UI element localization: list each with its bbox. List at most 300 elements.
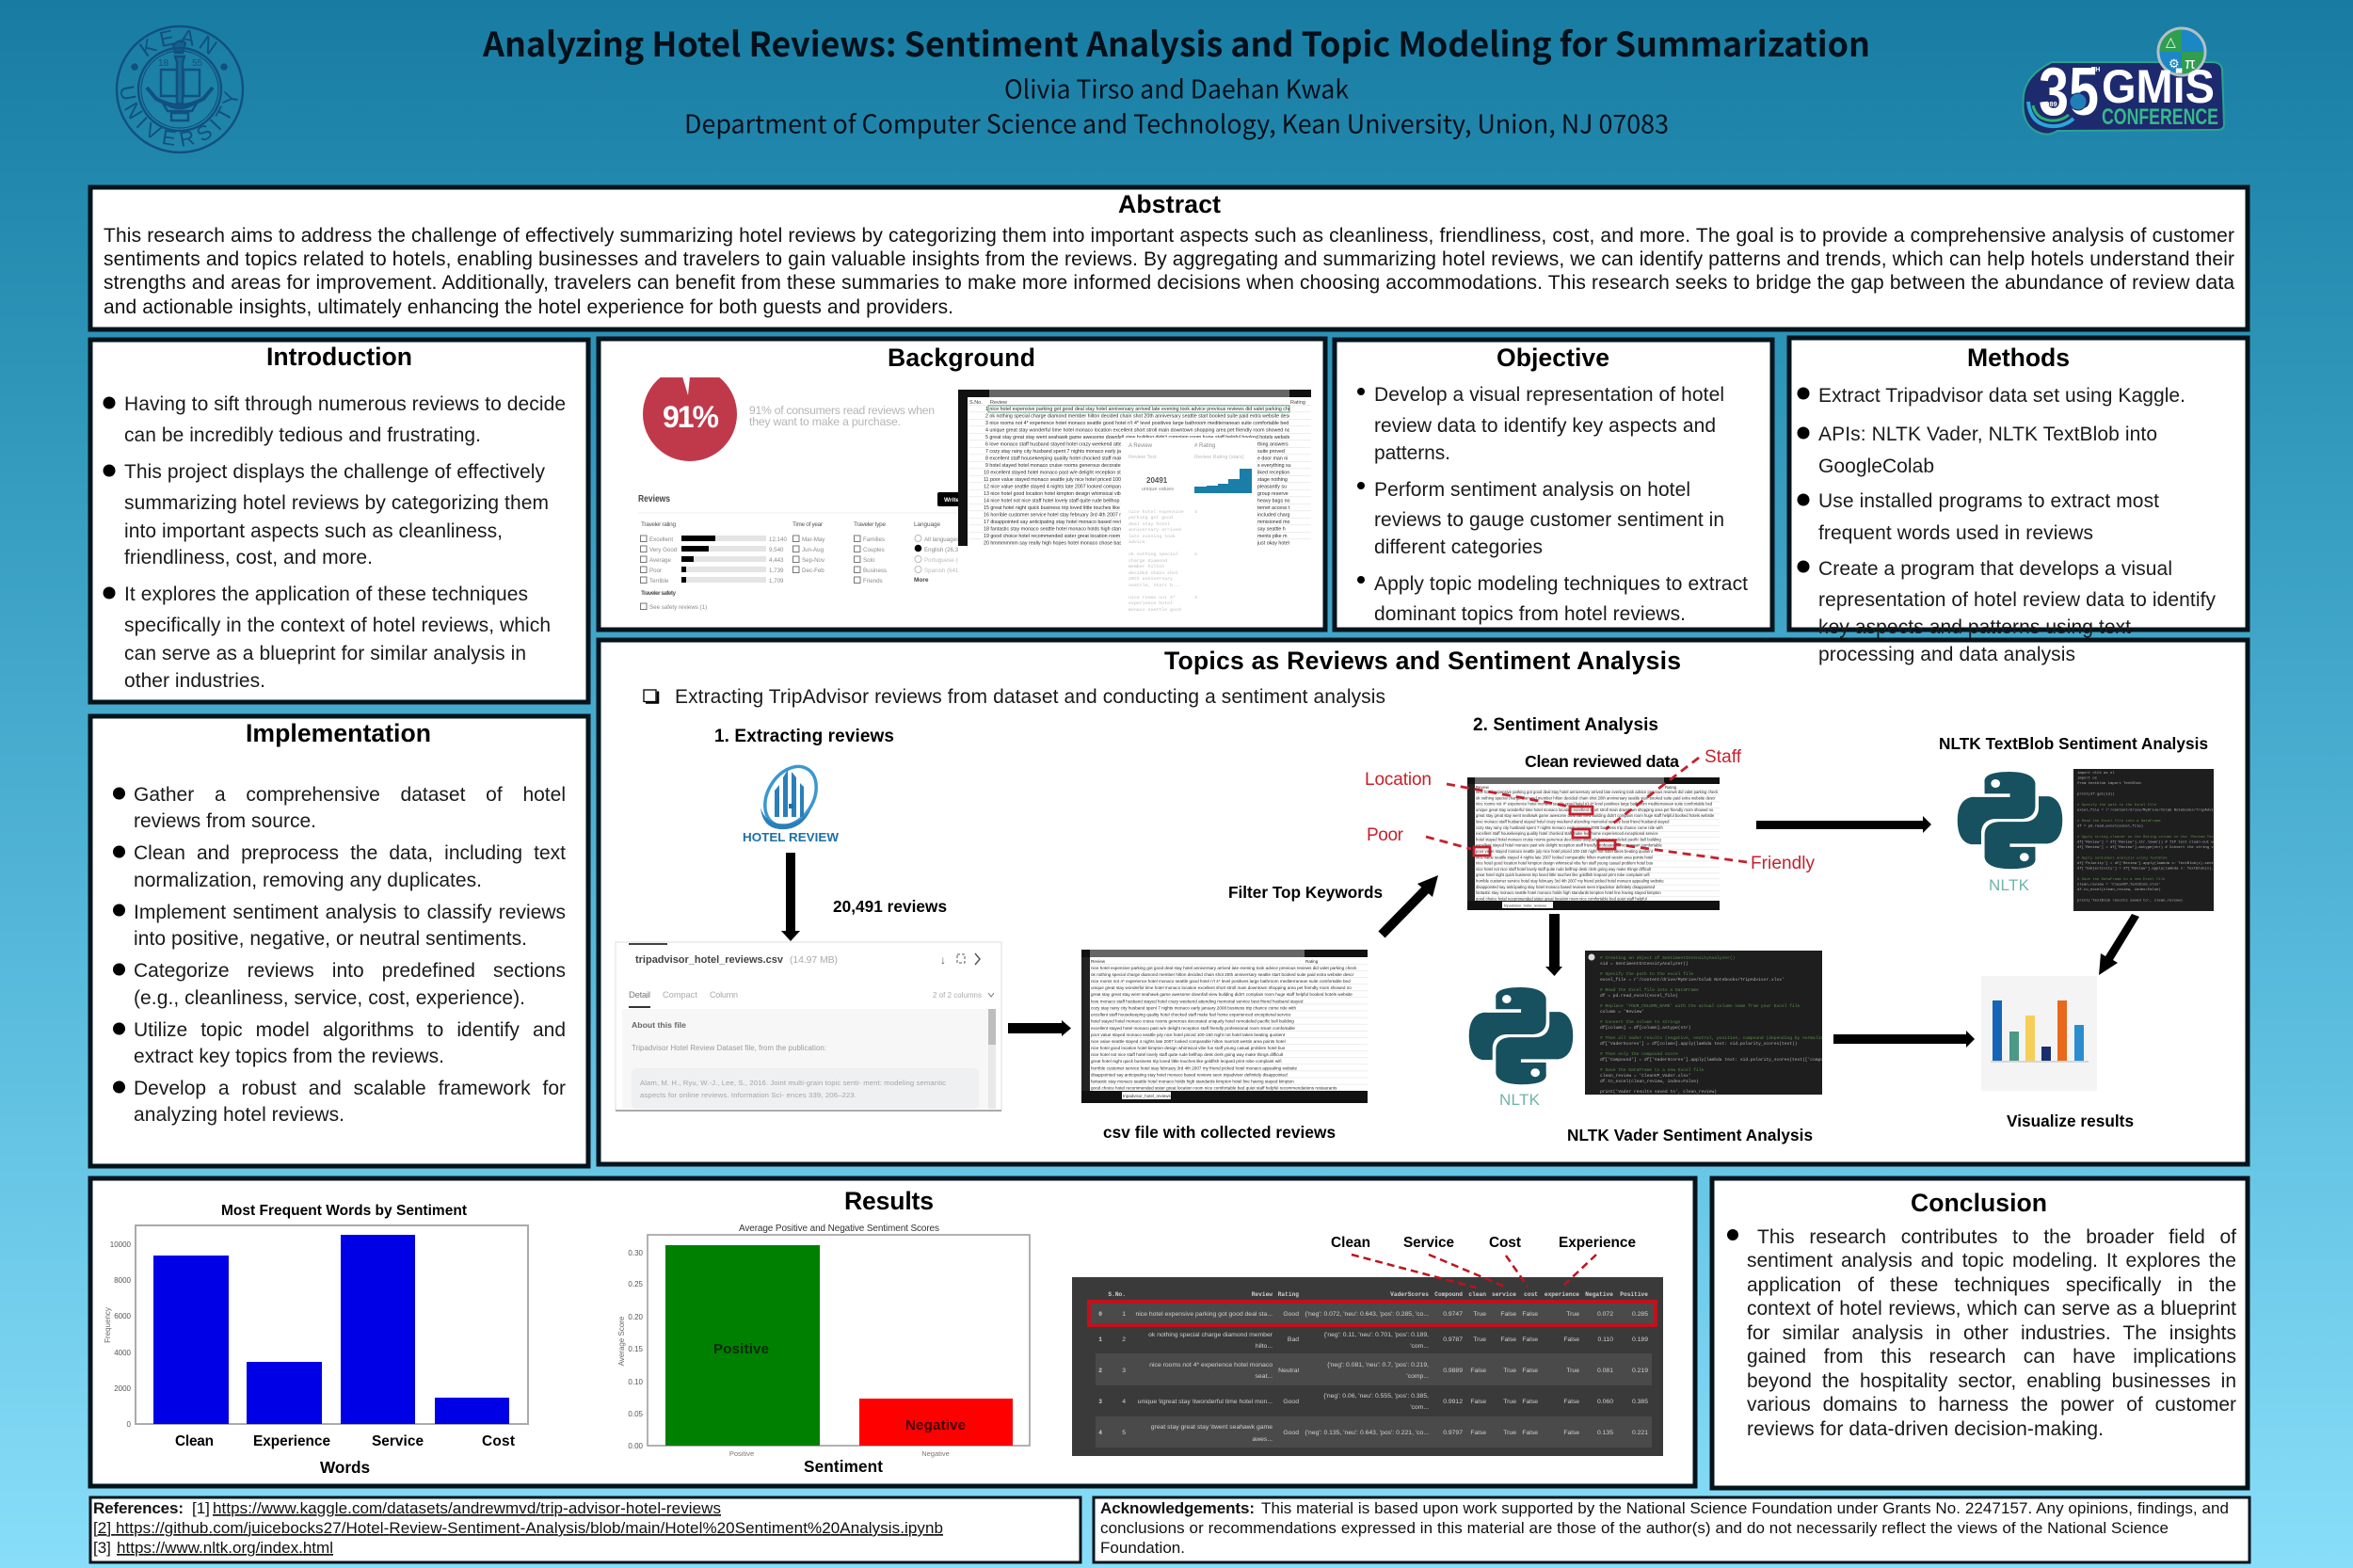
kaggle file card screenshot: About this file — [632, 1020, 686, 1030]
code screenshot: textblob: print(df.get(id)) — [2077, 792, 2115, 796]
arrow: logo to file — [781, 853, 800, 941]
introduction text: into important aspects such as cleanliness, — [124, 520, 503, 542]
table: sentiment scores screenshot: experience — [1545, 1291, 1579, 1298]
icon: 35th GMiS conference logo: TH — [2091, 67, 2100, 73]
spreadsheet screenshot with review column summary: 20th anniversary — [1128, 576, 1173, 582]
chart: most frequent words by sentiment — [104, 1203, 528, 1477]
authors: Olivia Tirso and Daehan Kwak — [1004, 70, 1349, 105]
kaggle file card screenshot: ↓ — [940, 953, 946, 967]
arrow: clean data to textblob — [1756, 816, 1931, 833]
spreadsheet screenshot with review column summary: experience hotel — [1128, 600, 1173, 606]
implementation text: extract key topics from the reviews. — [134, 1046, 444, 1067]
spreadsheet screenshot with review column summary: parking got good — [1128, 515, 1173, 520]
code screenshot: textblob: from textblob import TextBlob — [2077, 781, 2141, 786]
icon: python NLTK textblob — [1958, 772, 2062, 894]
objective text: Perform sentiment analysis on hotel — [1374, 479, 1690, 501]
introduction text: This project displays the challenge of effectively — [124, 461, 546, 483]
objective text: patterns. — [1374, 442, 1450, 464]
chart: most frequent words by sentiment: Frequency — [104, 1307, 112, 1343]
clean data spreadsheet with keyword callouts: horrible customer service hotel stay february 3rd 4th 2007 my friend picked hotel monaco appealing website — [1476, 879, 1664, 883]
csv spreadsheet screenshot: great stay great stay went seahawk game awesome downfall view building didn't complain room huge staff helpful booked hotels website — [1091, 992, 1353, 997]
code screenshot: vader: df[column] = df[column].astype(str) — [1600, 1025, 1690, 1031]
reviews filter screenshot: Language — [914, 521, 940, 528]
table: sentiment scores screenshot: {'neg': 0.06, 'neu': 0.555, 'pos': 0.385, — [1323, 1393, 1429, 1400]
table: sentiment scores screenshot: unique \tgreat stay \twonderful time hotel mon... — [1138, 1399, 1273, 1405]
table: sentiment scores screenshot: False — [1522, 1311, 1538, 1318]
conclusion text: beyond the hospitality sector, enabling businesses in — [1747, 1370, 2236, 1392]
table: sentiment scores screenshot: True — [1566, 1368, 1579, 1374]
table: sentiment scores screenshot: VaderScores — [1390, 1291, 1429, 1298]
kaggle file card screenshot: Detail — [629, 990, 650, 1000]
implementation text: Develop a robust and scalable framework for — [134, 1078, 566, 1099]
callouts: table column labels: Service — [1403, 1235, 1454, 1251]
implementation bullets — [113, 787, 125, 1094]
spreadsheet screenshot with review column summary: 20 hmmmmmm say really high hopes hotel monaco chose base girl — [984, 540, 1132, 546]
heading: abstract: Abstract — [1118, 190, 1221, 218]
csv spreadsheet screenshot: tripadvisor_hotel_reviews — [1123, 1094, 1172, 1098]
code screenshot: textblob: df['Polarity'] = df['Review'].apply(lambda x: TextBlob(x).sentiment.polarity) — [2077, 861, 2247, 866]
clean data spreadsheet with keyword callouts — [1365, 747, 1815, 910]
spreadsheet screenshot with review column summary: ok nothing special — [1128, 552, 1178, 557]
conclusion text: context of hotel reviews, which can serve as a blueprint — [1747, 1298, 2236, 1320]
spreadsheet screenshot with review column summary: 18 fantastic stay monaco seattle hotel monaco holds high standards kimpton hotel line having stayed — [984, 527, 1206, 533]
chart: 91 percent pie: 91% — [663, 400, 719, 434]
table: sentiment scores screenshot: 0.221 — [1632, 1430, 1648, 1436]
chart: average positive and negative sentiment scores: 0.10 — [628, 1378, 644, 1386]
spreadsheet screenshot with review column summary: 13 nice hotel good location hotel kimpton design whimsical vibe fun staff young casual problem hotel — [984, 491, 1205, 497]
chart: most frequent words by sentiment: Words — [320, 1458, 370, 1477]
code screenshot: textblob: excel_file = r'/content/drive/MyDrive/Colab Notebooks/TripAdvisor.xlsx' — [2077, 808, 2233, 813]
reviews filter screenshot — [638, 492, 969, 611]
heading: methods: Methods — [1967, 344, 2070, 372]
table: sentiment scores screenshot: 2 — [1098, 1368, 1102, 1374]
csv spreadsheet screenshot: fantastic stay monaco seattle hotel monaco holds high standards kimpton hotel line having stayed kimpton — [1091, 1079, 1294, 1084]
introduction text: Having to sift through numerous reviews to decide — [124, 393, 566, 415]
methods text: Extract Tripadvisor data set using Kaggle. — [1818, 385, 2185, 407]
panel: abstract — [90, 187, 2248, 329]
caption: visualize results: Visualize results — [2007, 1112, 2134, 1130]
panel: acknowledgements: This material is based upon work supported by the National Science Foundation under Grants No. 2247157. Any opinions, findings, and — [1261, 1499, 2229, 1517]
spreadsheet screenshot with review column summary: Review Rating (stars) — [1194, 455, 1244, 460]
table: sentiment scores screenshot: 4 — [1098, 1430, 1102, 1436]
arrow: vader to visualize — [1833, 1031, 1975, 1048]
table: sentiment scores screenshot: 0.9787 — [1443, 1336, 1463, 1343]
heading: conclusion: Conclusion — [1911, 1189, 2047, 1217]
spreadsheet screenshot with review column summary: s everything su — [1257, 463, 1291, 469]
table: sentiment scores screenshot: Rating — [1278, 1291, 1299, 1298]
chart: most frequent words by sentiment: Cost — [482, 1433, 515, 1449]
objective text — [1374, 384, 1748, 625]
icon: Kean University seal: 55 — [192, 58, 203, 69]
reviews filter screenshot: Excellent — [649, 536, 673, 543]
icon: 35th GMiS conference logo: GMiS — [2102, 60, 2215, 113]
table: sentiment scores screenshot: 0.9912 — [1443, 1399, 1463, 1405]
table: sentiment scores screenshot: False — [1563, 1430, 1579, 1436]
spreadsheet screenshot with review column summary: seattle, start b... — [1128, 583, 1181, 588]
reviews filter screenshot: 12,140 — [769, 536, 787, 543]
icon: 35th GMiS conference logo — [2023, 28, 2224, 135]
clean data spreadsheet with keyword callouts: disappointed say anticipating stay hotel monaco based reviews seen tripadvisor definitely disappointed — [1476, 885, 1656, 889]
table: sentiment scores screenshot: False — [1522, 1399, 1538, 1405]
table: sentiment scores screenshot: True — [1473, 1336, 1486, 1343]
introduction text: can serve as a blueprint for similar analysis in — [124, 643, 526, 664]
icon: 35th GMiS conference logo: 35 — [2039, 55, 2099, 130]
panel: references: https://www.nltk.org/index.html — [117, 1539, 333, 1557]
table: sentiment scores screenshot: False — [1522, 1336, 1538, 1343]
reviews filter screenshot: Families — [863, 536, 885, 543]
code screenshot: textblob: import nltk as nl — [2077, 771, 2115, 776]
clean data spreadsheet with keyword callouts: cozy stay rainy city husband spent 7 nights monaco early january 2008 business trip chance come ride with — [1476, 825, 1663, 830]
kaggle file card screenshot: (14.97 MB) — [790, 954, 838, 966]
reviews filter screenshot: More — [914, 577, 929, 584]
csv spreadsheet screenshot: poor value stayed monaco seattle july nice hotel priced 100-150 night not hotel takes beating quotient — [1091, 1032, 1286, 1037]
spreadsheet screenshot with review column summary: 20491 — [1146, 476, 1168, 485]
clean data spreadsheet with keyword callouts: unique great stay wonderful time hotel monaco location excellent short stroll main downtown shopping area pet friendly room showed no — [1476, 808, 1714, 812]
code screenshot: textblob: df.to_excel(clean_review, index=False) — [2077, 888, 2161, 892]
chart: average positive and negative sentiment scores: Average Positive and Negative Sentiment Scores — [739, 1224, 939, 1234]
label: 20,491 reviews: 20,491 reviews — [833, 897, 947, 916]
clean data spreadsheet with keyword callouts: great stay great stay went seahawk game awesome downfall view building didn't complain room huge staff helpful booked hotels website — [1476, 813, 1715, 818]
reviews filter screenshot: 9,540 — [769, 547, 784, 553]
objective text: Apply topic modeling techniques to extract — [1374, 573, 1748, 595]
heading: implementation: Implementation — [246, 719, 431, 747]
table: sentiment scores screenshot: clean — [1468, 1291, 1486, 1298]
spreadsheet screenshot with review column summary: decided chain shot — [1128, 570, 1178, 576]
code screenshot: vader: df['Compound'] = df['VaderScores'].apply(lambda text: sid.polarity_scores(text)['compound']) — [1600, 1057, 1839, 1063]
objective text: Develop a visual representation of hotel — [1374, 384, 1724, 406]
reviews filter screenshot: All languages — [924, 536, 959, 543]
reviews filter screenshot: Traveler type — [854, 521, 886, 528]
icon: 35th GMiS conference logo: CONFERENCE — [2102, 104, 2218, 130]
reviews filter screenshot: Sep-Nov — [802, 557, 825, 564]
csv spreadsheet screenshot: horrible customer service hotel stay february 3rd 4th 2007 my friend picked hotel monaco appealing website — [1091, 1065, 1298, 1071]
code screenshot: textblob: # Specify the path to the Excel file — [2077, 803, 2157, 808]
icon: python NLTK textblob: NLTK — [1989, 876, 2030, 894]
kaggle file card screenshot: aspects for online reviews. Information Sci- ences 339, 206–223. — [640, 1091, 856, 1099]
kaggle file card screenshot: 2 of 2 columns — [933, 991, 982, 1000]
table: sentiment scores screenshot: 0.9747 — [1443, 1311, 1463, 1318]
table: sentiment scores screenshot: True — [1503, 1399, 1516, 1405]
chart: average positive and negative sentiment scores: Negative — [905, 1417, 966, 1433]
csv spreadsheet screenshot: nice rooms not 4* experience hotel monaco seattle good hotel n't 4* level positives large bathroom mediterranean suite comfortable bed — [1091, 979, 1351, 984]
kaggle file card screenshot: Compact — [663, 990, 697, 1000]
csv spreadsheet screenshot: excellent staff housekeeping quality hotel chocked staff make feel home experienced exceptional service — [1091, 1013, 1291, 1016]
panel: acknowledgements — [1094, 1497, 2249, 1562]
chart: most frequent words by sentiment: 0 — [127, 1420, 132, 1429]
table: sentiment scores screenshot: Compound — [1434, 1291, 1463, 1298]
methods text: Use installed programs to extract most — [1818, 490, 2159, 512]
panel: results — [90, 1178, 1695, 1486]
chart: most frequent words by sentiment: Experience — [253, 1433, 330, 1449]
table: sentiment scores screenshot: 'com... — [1410, 1404, 1429, 1411]
csv spreadsheet screenshot — [1081, 950, 1368, 1103]
csv spreadsheet screenshot: excellent stayed hotel monaco past w/e delight reception staff friendly professional room smart comfortable — [1091, 1026, 1295, 1031]
methods text: processing and data analysis — [1818, 644, 2075, 665]
spreadsheet screenshot with review column summary: suite proved — [1257, 449, 1285, 455]
panel: references: https://www.kaggle.com/datasets/andrewmvd/trip-advisor-hotel-reviews — [213, 1499, 721, 1517]
abstract text: strengths and areas for improvement. Additionally, travelers can benefit from these summaries to make more informed decisions when choosing accommodations. This research seeks to bridge the gap between the abundance of review data — [104, 272, 2234, 294]
spreadsheet screenshot with review column summary: 4 — [1194, 509, 1197, 515]
chart: average positive and negative sentiment scores: 0.00 — [628, 1442, 644, 1450]
reviews filter screenshot: Friends — [863, 578, 883, 584]
spreadsheet screenshot with review column summary: charge diamond — [1128, 558, 1167, 564]
table: sentiment scores screenshot: seat... — [1255, 1373, 1273, 1380]
reviews filter screenshot: Average — [649, 557, 671, 564]
table: sentiment scores screenshot: False — [1563, 1336, 1579, 1343]
icon: 35th GMiS conference logo: π — [2185, 55, 2196, 72]
clean data spreadsheet with keyword callouts: love monaco staff husband stayed hotel crazy weekend attending memorial service best friend husband stayed — [1476, 819, 1670, 824]
code screenshot: vader: # Replace 'YOUR_COLUMN_NAME' with the actual column name from your Excel file — [1600, 1003, 1801, 1009]
panel: acknowledgements: Foundation. — [1100, 1539, 1185, 1557]
reviews filter screenshot: Traveler rating — [641, 521, 676, 528]
implementation text: Utilize topic model algorithms to identify and — [134, 1019, 566, 1041]
arrow: csv to clean data — [1382, 875, 1438, 935]
panel: acknowledgements: Acknowledgements: — [1100, 1499, 1255, 1517]
table: sentiment scores screenshot: True — [1473, 1311, 1486, 1318]
chart: average positive and negative sentiment scores: 0.30 — [628, 1249, 644, 1257]
arrow: clean data to vader — [1545, 914, 1562, 976]
code screenshot: textblob: # Apply sentiment analysis using TextBlob — [2077, 856, 2168, 860]
table: sentiment scores screenshot: great stay great stay \twent seahawk game — [1151, 1424, 1273, 1431]
bullet: extracting reviews summary: Extracting TripAdvisor reviews from dataset and conducting a sentiment analysis — [675, 686, 1385, 708]
code screenshot: vader: excel_file = r'/content/drive/MyDrive/Colab Notebooks/TripAdvisor.xlsx' — [1600, 977, 1785, 983]
heading: results: Results — [844, 1187, 934, 1215]
spreadsheet screenshot with review column summary: 17 disappointed say anticipating stay hotel monaco based reviews seen tripadvisor definitely disappointed — [984, 520, 1217, 525]
spreadsheet screenshot with review column summary: 4 unique great stay wonderful time hotel monaco location excellent short stroll main downtown shopping area pet friendly room showed no — [985, 427, 1290, 433]
implementation text: Gather a comprehensive dataset of hotel — [134, 784, 566, 806]
caption: 91 percent of consumers — [749, 404, 935, 428]
panel: references: [1] — [192, 1499, 210, 1517]
callouts: table column labels: Clean — [1331, 1235, 1370, 1251]
code screenshot: textblob: clean_review = 'CleanVP_TextBlob.xlsx' — [2077, 883, 2161, 887]
table: sentiment scores screenshot: False — [1470, 1368, 1486, 1374]
spreadsheet screenshot with review column summary: Review Text — [1128, 455, 1157, 460]
heading: background: Background — [888, 344, 1035, 372]
label: filter top keywords: Filter Top Keywords — [1228, 883, 1383, 902]
code screenshot: textblob: df = pd.read_excel(excel_file) — [2077, 824, 2143, 828]
methods text: GoogleColab — [1818, 456, 1934, 477]
table: sentiment scores screenshot: nice hotel expensive parking got good deal sta... — [1136, 1311, 1273, 1318]
header block — [482, 18, 1870, 141]
spreadsheet screenshot with review column summary: 11 poor value stayed monaco seattle july nice hotel priced 100-150 night not hotel takes beating quotient — [984, 477, 1214, 483]
csv spreadsheet screenshot: nice hotel expensive parking got good deal stay hotel anniversary arrived late evening took advice previous reviews did valet parking check — [1091, 966, 1357, 970]
introduction text: can be incredibly tedious and frustrating. — [124, 424, 481, 446]
icon: Kean University seal: UNIVERSITY — [120, 86, 238, 147]
step label: extracting reviews: 1. Extracting reviews — [714, 727, 894, 746]
clean data spreadsheet with keyword callouts: nice hotel expensive parking got good deal stay hotel anniversary arrived late evening took advice previous reviews did valet parking check — [1476, 790, 1719, 794]
code screenshot: vader — [1585, 951, 1822, 1095]
title: Analyzing Hotel Reviews: Sentiment Analysis and Topic Modeling for Summarization — [482, 18, 1870, 67]
reviews filter screenshot: Poor — [649, 568, 662, 574]
code screenshot: vader: df['VaderScores'] = df[column].apply(lambda text: sid.polarity_scores(text)) — [1600, 1041, 1798, 1047]
spreadsheet screenshot with review column summary: ternet access t — [1257, 505, 1290, 511]
panel: methods — [1789, 338, 2248, 665]
table: sentiment scores screenshot: False — [1500, 1336, 1516, 1343]
spreadsheet screenshot with review column summary: 8 excellent staff housekeeping quality hotel chocked staff make feel home experienced exceptional service — [985, 456, 1221, 461]
clean data spreadsheet with keyword callouts: nice hotel not nice staff hotel lovely staff quite rude bellhop desk clerk going way make things difficult — [1476, 867, 1652, 872]
methods text: APIs: NLTK Vader, NLTK TextBlob into — [1818, 424, 2157, 445]
table: sentiment scores screenshot: nice rooms not 4* experience hotel monaco — [1149, 1362, 1273, 1368]
reviews filter screenshot: Terrible — [649, 578, 669, 584]
code screenshot: vader: # Convert the column to strings — [1600, 1019, 1681, 1025]
icon: visualize results bar chart — [1981, 976, 2097, 1091]
spreadsheet screenshot with review column summary: A Review — [1128, 443, 1153, 449]
table: sentiment scores screenshot: Bad — [1288, 1336, 1299, 1343]
panel: references: [2] https://github.com/juicebocks27/Hotel-Review-Sentiment-Analysis/blob/main/Hotel%20Sentiment%20Analysis.ipynb — [93, 1519, 943, 1537]
introduction text: specifically in the context of hotel reviews, which — [124, 615, 551, 636]
code screenshot: vader: clean_review = 'CleanVP_Vader.xlsx' — [1600, 1073, 1690, 1079]
table: sentiment scores screenshot: True — [1566, 1311, 1579, 1318]
chart: most frequent words by sentiment: Most Frequent Words by Sentiment — [221, 1203, 467, 1219]
reviews filter screenshot: Business — [863, 568, 887, 574]
introduction text: friendliness, cost, and more. — [124, 547, 373, 568]
table: sentiment scores screenshot: 5 — [1122, 1430, 1126, 1436]
spreadsheet screenshot with review column summary: 3 — [1194, 595, 1197, 600]
kaggle file card screenshot: Column — [710, 990, 738, 1000]
chart: average positive and negative sentiment scores: 0.05 — [628, 1410, 644, 1418]
icon: Kean University seal — [115, 24, 245, 154]
clean data spreadsheet with keyword callouts: fantastic stay monaco seattle hotel monaco holds high standards kimpton hotel line having stayed kimpton — [1476, 890, 1661, 895]
abstract text: and actionable insights, ultimately enhancing the hotel experience for both guests and providers. — [104, 296, 953, 318]
reviews filter screenshot: 1,739 — [769, 568, 784, 574]
spreadsheet screenshot with review column summary: S.No. — [969, 400, 983, 406]
panel: references: References: — [93, 1499, 184, 1517]
clean data spreadsheet with keyword callouts: nice value seattle stayed 4 nights late 2007 looked comparable hilton marriott westin area points hotel — [1476, 855, 1653, 859]
spreadsheet screenshot with review column summary: 2 ok nothing special charge diamond member hilton decided chain shot 20th anniversary seattle start booked suite paid extra website descr — [985, 414, 1293, 420]
objective text: reviews to gauge customer sentiment in — [1374, 509, 1724, 531]
code screenshot: vader: # Specify the path to the excel file — [1600, 971, 1693, 977]
introduction text: summarizing hotel reviews by categorizing them — [124, 492, 549, 514]
icon: Kean University seal: KEAN — [139, 30, 217, 56]
implementation text: analyzing hotel reviews. — [134, 1104, 344, 1126]
table: sentiment scores screenshot: Negative — [1585, 1291, 1613, 1298]
table: sentiment scores screenshot: True — [1503, 1368, 1516, 1374]
csv spreadsheet screenshot: unique great stay wonderful time hotel monaco location excellent short stroll main downtown shopping area pet friendly room showed no — [1091, 985, 1352, 990]
table: sentiment scores screenshot: Good — [1283, 1399, 1299, 1405]
objective text: different categories — [1374, 536, 1543, 558]
table: sentiment scores screenshot: 0.110 — [1597, 1336, 1613, 1343]
spreadsheet screenshot with review column summary: monaco seattle good — [1128, 607, 1181, 613]
label: clean reviewed data: Clean reviewed data — [1525, 752, 1679, 771]
code screenshot: textblob: # Read the Excel file into a DataFrame — [2077, 819, 2161, 824]
csv spreadsheet screenshot: nice hotel good location hotel kimpton design whimsical vibe fun staff young casual problem hotel bus — [1091, 1046, 1286, 1050]
panel: references: [3] — [93, 1539, 111, 1557]
table: sentiment scores screenshot: 0 — [1098, 1311, 1102, 1318]
table: sentiment scores screenshot: False — [1563, 1399, 1579, 1405]
chart: 91 percent pie — [643, 377, 737, 461]
table: sentiment scores screenshot: 0.060 — [1597, 1399, 1613, 1405]
table: sentiment scores screenshot: S.No. — [1108, 1291, 1126, 1298]
reviews filter screenshot: Write — [944, 497, 960, 504]
reviews filter screenshot: Mar-May — [802, 536, 825, 543]
implementation text — [134, 781, 566, 1126]
methods text — [1818, 385, 2216, 665]
reviews filter screenshot: Reviews — [638, 494, 670, 504]
code screenshot: vader: print('Vader results saved to', clean_review) — [1600, 1089, 1717, 1095]
chart: most frequent words by sentiment: Service — [372, 1433, 424, 1449]
conclusion bullet — [1727, 1229, 1738, 1240]
csv spreadsheet screenshot: Review — [1091, 959, 1106, 964]
spreadsheet screenshot with review column summary: anniversary arrived — [1128, 527, 1181, 533]
spreadsheet screenshot with review column summary: 2 — [1194, 552, 1197, 557]
clean data spreadsheet with keyword callouts: good choice hotel recommended sister great location room nice comfortable bed quiet staff helpful — [1476, 896, 1647, 901]
spreadsheet screenshot with review column summary: 12 nice value seattle stayed 4 nights late 2007 looked comparable hilton marriott westin area points — [984, 484, 1203, 489]
table: sentiment scores screenshot: False — [1522, 1430, 1538, 1436]
spreadsheet screenshot with review column summary: 19 good choice hotel recommended sister great location room nice comfortable bed quiet staff helpful — [984, 534, 1207, 539]
conclusion text: application of these techniques specifically in the — [1747, 1274, 2236, 1296]
csv spreadsheet screenshot: ok nothing special charge diamond member hilton decided chain shot 20th anniversary seattle start booked suite paid extra website descr — [1091, 972, 1354, 977]
kaggle file card screenshot — [616, 942, 1001, 1111]
implementation text: into positive, negative, or neutral sentiments. — [134, 928, 527, 950]
spreadsheet screenshot with review column summary: # Rating — [1194, 443, 1215, 449]
table: sentiment scores screenshot: 3 — [1122, 1368, 1126, 1374]
clean data spreadsheet with keyword callouts: great hotel night quick business trip loved little touches like goldfish leopard print robe complaint wifi — [1476, 872, 1650, 877]
clean data spreadsheet with keyword callouts: Poor — [1367, 825, 1404, 845]
spreadsheet screenshot with review column summary: say seattle h — [1257, 527, 1286, 533]
methods bullets — [1798, 388, 1809, 572]
chart: most frequent words by sentiment: 10000 — [110, 1240, 132, 1249]
table: sentiment scores screenshot: Good — [1283, 1430, 1299, 1436]
kaggle file card screenshot: tripadvisor_hotel_reviews.csv — [635, 954, 784, 966]
methods text: Create a program that develops a visual — [1818, 558, 2172, 580]
chart: most frequent words by sentiment: 6000 — [114, 1312, 132, 1320]
clean data spreadsheet with keyword callouts: tripadvisor_hotel_reviews — [1504, 904, 1546, 907]
csv spreadsheet screenshot: cozy stay rainy city husband spent 7 nights monaco early january 2008 business trip chance come ride with — [1091, 1005, 1297, 1011]
methods text: key aspects and patterns using text — [1818, 616, 2131, 638]
clean data spreadsheet with keyword callouts: ok nothing special charge diamond member hilton decided chain shot 20th anniversary seattle start booked suite paid extra website descr — [1476, 795, 1716, 800]
panel: implementation — [90, 716, 588, 1166]
spreadsheet screenshot with review column summary: nice hotel expensive — [1128, 509, 1184, 515]
code screenshot: vader: sid = SentimentIntensityAnalyzer() — [1600, 961, 1689, 967]
implementation text: normalization, removing any duplicates. — [134, 870, 482, 891]
table: sentiment scores screenshot: False — [1500, 1311, 1516, 1318]
spreadsheet screenshot with review column summary: unique values — [1142, 487, 1174, 492]
reviews filter screenshot: Spanish (641) — [924, 568, 961, 574]
table: sentiment scores screenshot: 4 — [1122, 1399, 1126, 1405]
clean data spreadsheet with keyword callouts: Rating — [1665, 785, 1677, 790]
table: sentiment scores screenshot: {'neg': 0.11, 'neu': 0.701, 'pos': 0.189, — [1324, 1332, 1429, 1338]
callouts: table column labels: Cost — [1489, 1235, 1521, 1251]
clean data spreadsheet with keyword callouts: poor value stayed monaco seattle july nice hotel priced 100-150 night not hotel takes beating quotient — [1476, 849, 1654, 854]
icon: 35th GMiS conference logo: △ — [2166, 34, 2176, 49]
table: sentiment scores screenshot: 0.9889 — [1443, 1368, 1463, 1374]
clean data spreadsheet with keyword callouts: nice hotel good location hotel kimpton design whimsical vibe fun staff young casual problem hotel bus — [1476, 861, 1653, 866]
heading: objective: Objective — [1497, 344, 1609, 372]
icon: hotel review logo — [743, 757, 840, 844]
caption: csv file: csv file with collected reviews — [1103, 1123, 1336, 1142]
code screenshot: textblob: df['Review'] = df['Review'].str.lower() # TIP text clean-out with strings — [2077, 840, 2238, 845]
chart: average positive and negative sentiment scores: 0.15 — [628, 1345, 644, 1353]
abstract text: This research aims to address the challenge of effectively summarizing hotel reviews by categorizing them into important aspects such as cleanliness, friendliness, cost, and more. The goal is to provide a comprehensive analysis of customer — [104, 225, 2234, 247]
implementation text: (e.g., cleanliness, service, cost, experience). — [134, 987, 525, 1009]
chart: most frequent words by sentiment: 8000 — [114, 1276, 132, 1285]
spreadsheet screenshot with review column summary: 6 love monaco staff husband stayed hotel crazy weekend attending memorial service best friend husband — [985, 442, 1218, 448]
reviews filter screenshot: See safety reviews (1) — [649, 604, 707, 611]
chart: average positive and negative sentiment scores: 0.20 — [628, 1313, 644, 1321]
conclusion text: This research contributes to the broader field of — [1757, 1226, 2236, 1248]
caption: 91 percent of consumers: they want to make a purchase. — [749, 415, 901, 428]
table: sentiment scores screenshot: {'neg': 0.072, 'neu': 0.643, 'pos': 0.285, 'co... — [1305, 1311, 1429, 1318]
spreadsheet screenshot with review column summary: included charg — [1257, 512, 1290, 518]
panel: topics as reviews and sentiment analysis — [599, 640, 2255, 1164]
icon: python NLTK vader — [1469, 987, 1573, 1109]
reviews filter screenshot: Couples — [863, 547, 885, 553]
chart: average positive and negative sentiment scores: Negative — [921, 1449, 950, 1458]
table: sentiment scores screenshot: True — [1503, 1430, 1516, 1436]
chart: average positive and negative sentiment scores: 0.25 — [628, 1280, 644, 1288]
implementation text: Categorize reviews into predefined sections — [134, 960, 566, 982]
clean data spreadsheet with keyword callouts: hotel stayed hotel monaco cruise rooms generous decorated uniquely hotel remodeled pacific bell building — [1476, 837, 1661, 841]
